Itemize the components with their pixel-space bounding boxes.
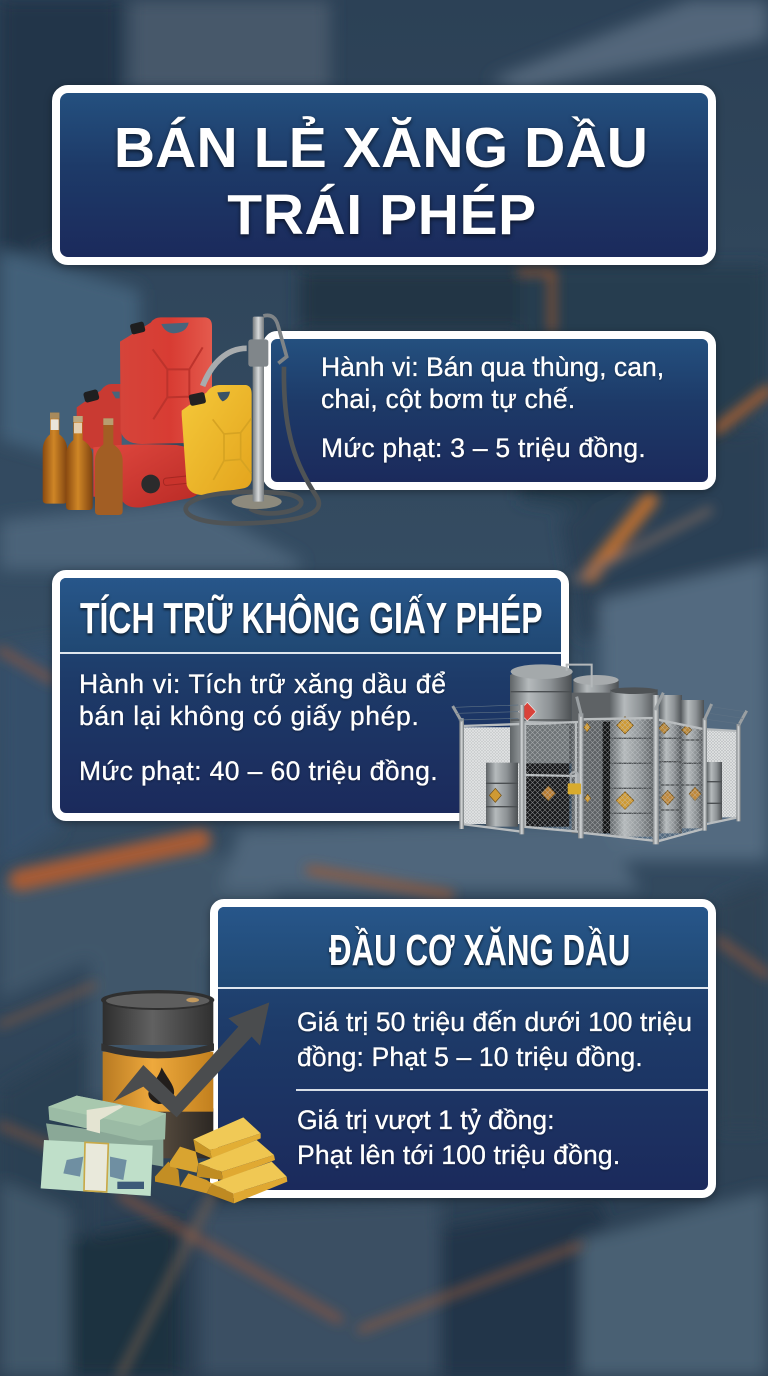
big red can <box>120 317 212 444</box>
icon: oil drum, arrow, cash and gold <box>40 990 288 1204</box>
heading: TÍCH TRỮ KHÔNG GIẤY PHÉP <box>80 594 543 643</box>
cash stacks <box>41 1096 166 1196</box>
fence rails <box>462 718 737 842</box>
behaviour text <box>321 352 664 414</box>
drum bands <box>486 692 722 813</box>
pump hose <box>186 367 319 523</box>
bottles <box>43 413 123 515</box>
pump spout <box>203 348 247 386</box>
heading: ĐẦU CƠ XĂNG DẦU <box>329 926 630 975</box>
title text line 1: BÁN LẺ XĂNG DẦU <box>114 116 648 180</box>
pump handle <box>263 315 287 363</box>
hazard labels <box>489 702 701 810</box>
icon: fenced storage of steel drums <box>452 664 748 844</box>
pump column <box>253 317 264 502</box>
icon: jerry cans, bottles and hand pump <box>42 314 322 526</box>
panel header band <box>218 907 708 989</box>
behaviour text <box>79 669 447 732</box>
divider <box>296 1089 708 1091</box>
rising arrow <box>113 1002 269 1117</box>
small red can <box>77 384 122 449</box>
pump base <box>232 494 282 509</box>
fence posts <box>459 695 741 844</box>
oil drum <box>101 990 214 1158</box>
fine text: Mức phạt: 40 – 60 triệu đồng. <box>79 756 438 786</box>
yellow can <box>182 385 252 495</box>
title panel <box>52 85 716 265</box>
behaviour text: bán lại không có giấy phép. <box>79 701 419 731</box>
behaviour text: Hành vi: Bán qua thùng, can, <box>321 352 664 382</box>
tier 2 text: Giá trị vượt 1 tỷ đồng: <box>297 1105 555 1135</box>
behaviour text: Hành vi: Tích trữ xăng dầu để <box>79 669 447 699</box>
behaviour text: chai, cột bơm tự chế. <box>321 384 575 414</box>
drums <box>572 693 610 833</box>
lying red can <box>93 444 200 508</box>
gold bars <box>155 1117 287 1203</box>
panel: hoarding without licence <box>52 570 569 821</box>
title text line 2: TRÁI PHÉP <box>227 183 537 247</box>
panel: retail violation <box>263 331 716 490</box>
tier 1 text <box>297 1007 692 1074</box>
tier 2 text: Phạt lên tới 100 triệu đồng. <box>297 1140 620 1170</box>
panel header band <box>60 578 561 654</box>
tier 2 text <box>297 1105 620 1172</box>
storage tanks <box>573 679 619 699</box>
barbed wire arms <box>453 693 747 726</box>
tier 1 text: Giá trị 50 triệu đến dưới 100 triệu <box>297 1007 692 1037</box>
chain-link mesh <box>523 722 578 832</box>
padlock <box>568 772 581 794</box>
fence backing <box>463 727 522 824</box>
tier 1 text: đồng: Phạt 5 – 10 triệu đồng. <box>297 1042 643 1072</box>
panel: speculation <box>210 899 716 1198</box>
fine text: Mức phạt: 3 – 5 triệu đồng. <box>321 433 646 463</box>
